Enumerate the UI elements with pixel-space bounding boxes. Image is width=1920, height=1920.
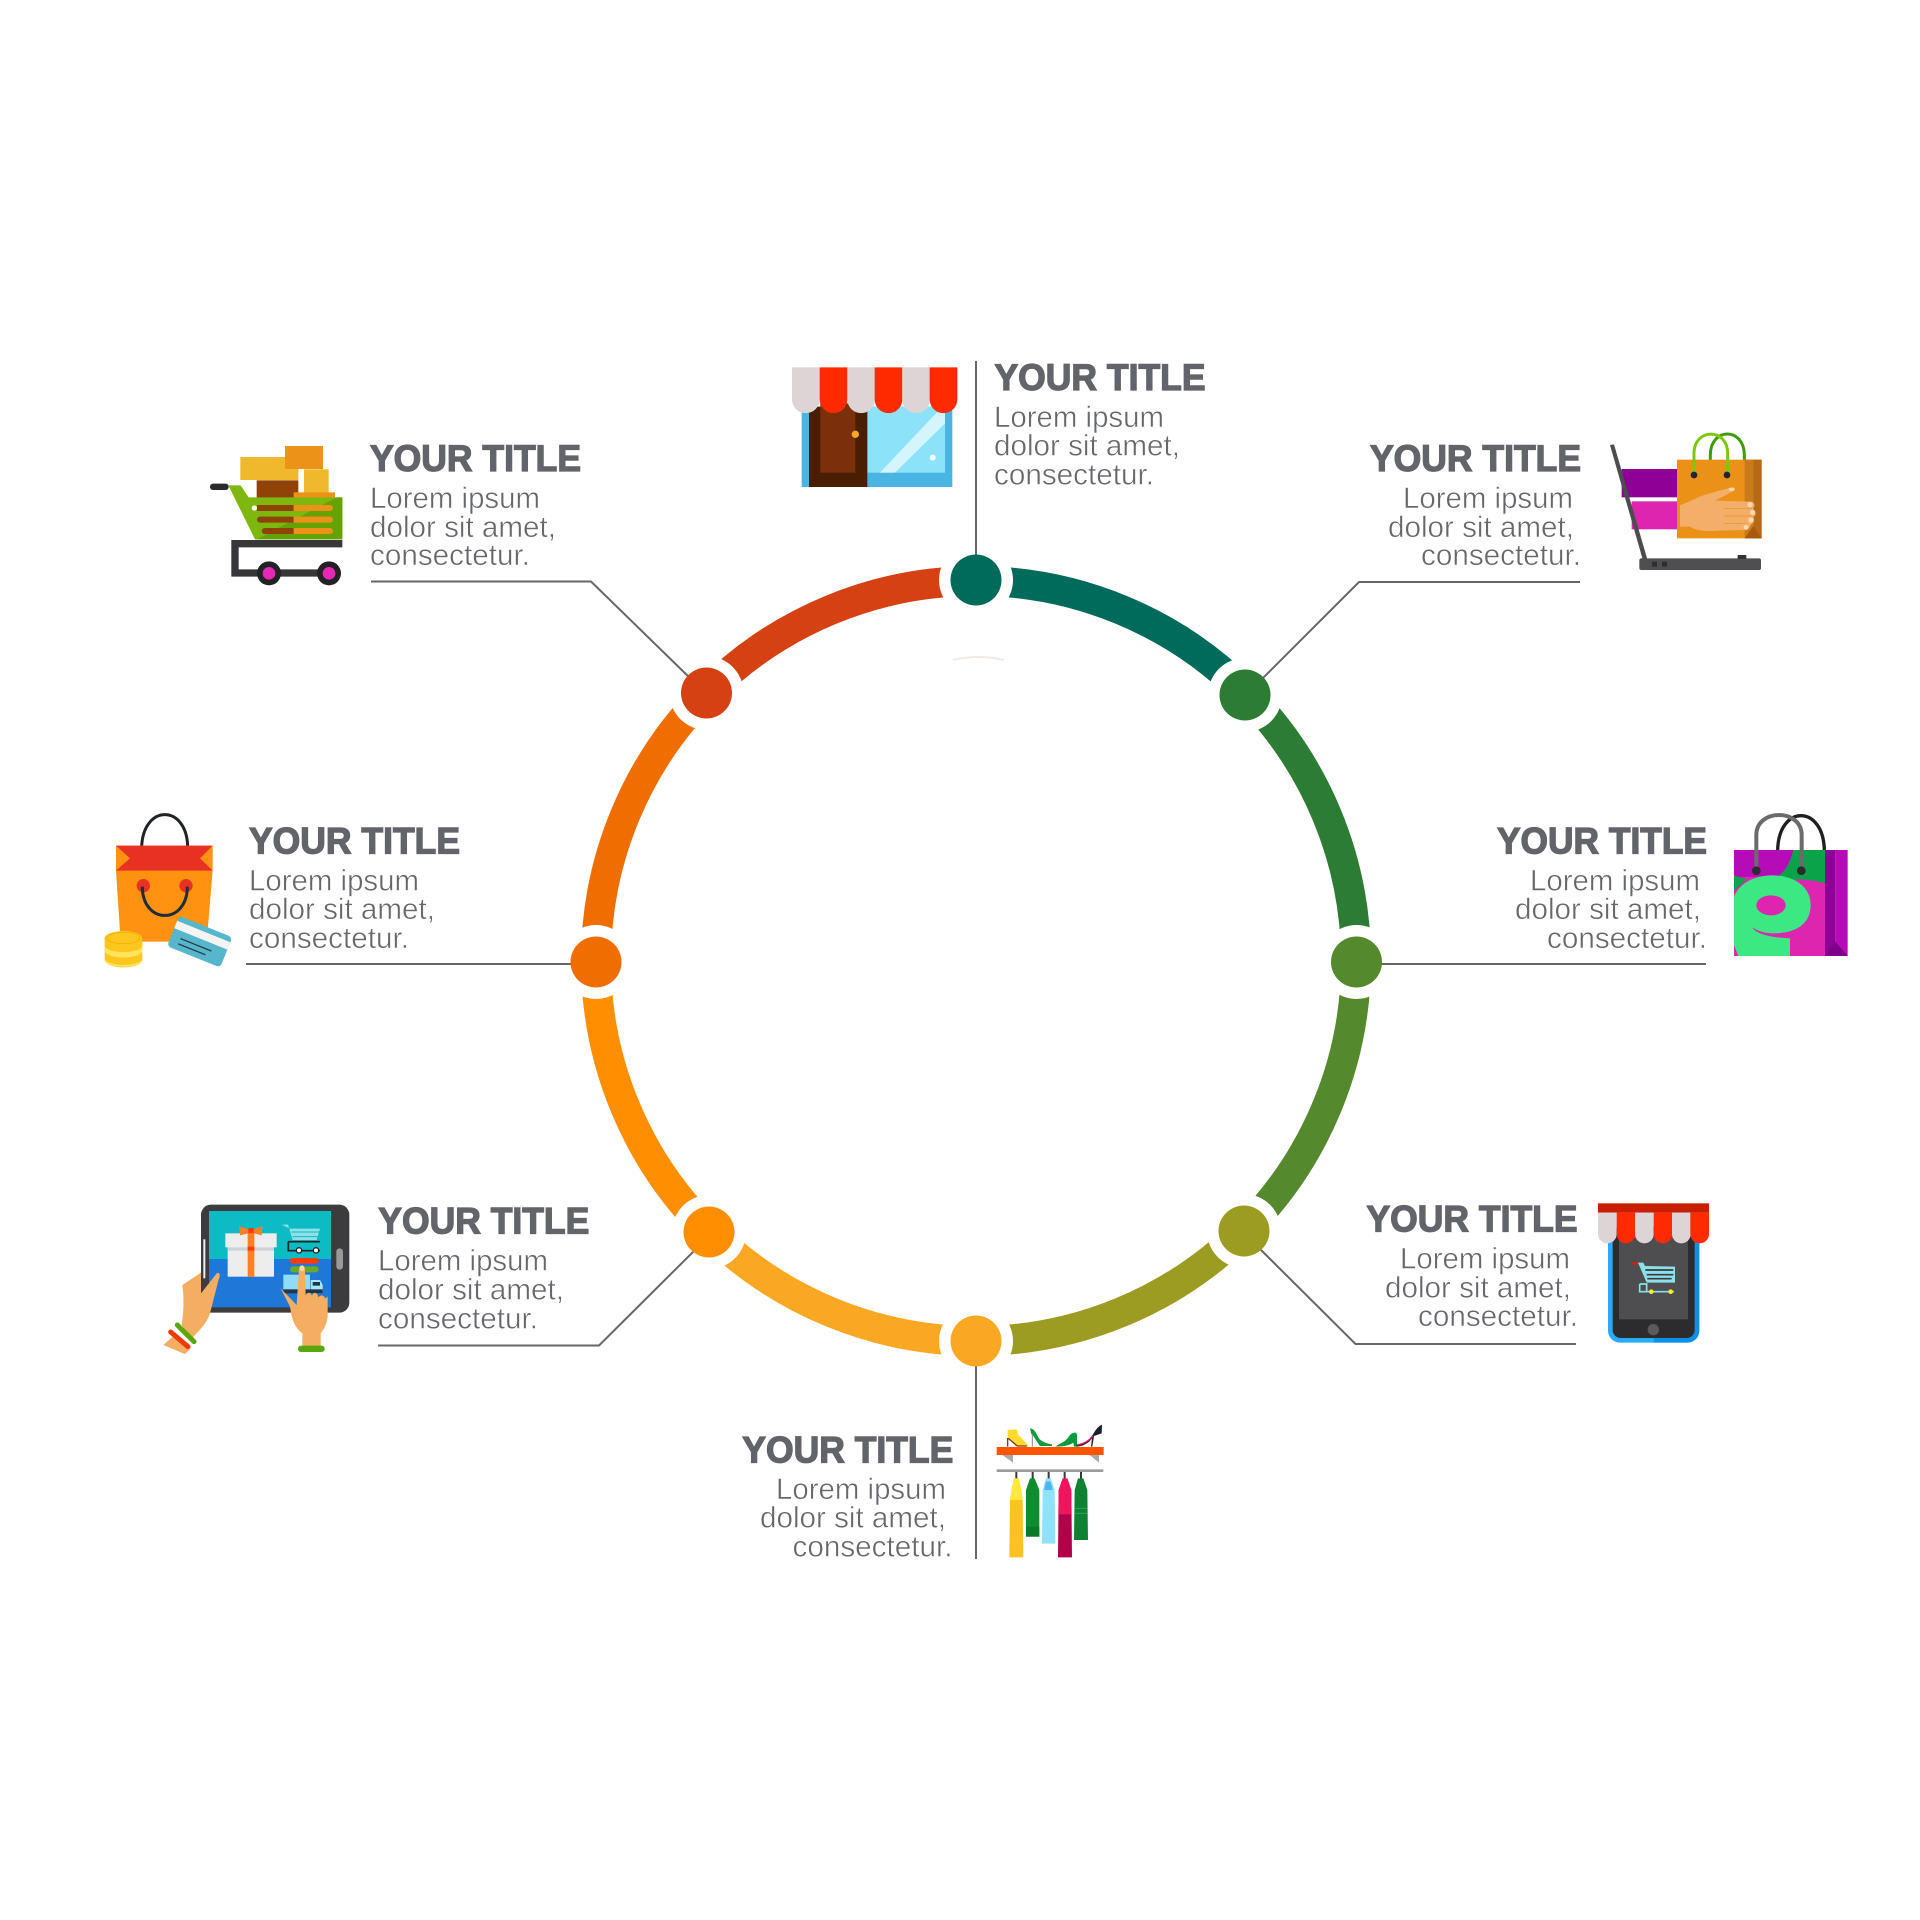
heading: YOUR TITLE [370,438,581,479]
ring nodes [570,554,1382,1366]
text block: dolor sit amet, [760,1501,946,1534]
panel: top right laptop [1370,434,1762,572]
panel: right bag [1497,815,1848,956]
text block: consectetur. [994,458,1154,491]
icon: magenta e-commerce bag [1734,815,1848,956]
text block: Lorem ipsum [776,1473,946,1506]
text block: consectetur. [1418,1300,1578,1333]
icon: laptop delivering bag [1610,434,1762,570]
text block: dolor sit amet, [249,893,435,926]
text block [1385,1243,1578,1333]
text block: dolor sit amet, [378,1273,564,1306]
text block [378,1245,564,1335]
heading: YOUR TITLE [1366,1198,1578,1239]
text block [249,864,435,955]
text block: Lorem ipsum [1403,482,1573,515]
text block [1515,864,1707,955]
text block: Lorem ipsum [1530,864,1700,898]
heading: YOUR TITLE [1497,820,1707,861]
text block: dolor sit amet, [1388,511,1574,544]
panel: bottom clothing rack [742,1425,1104,1564]
panel: top store [792,357,1206,491]
text block [760,1473,952,1564]
text block [994,401,1180,491]
icon: orange shopping bag with card and coins [104,815,232,968]
icon: shopping cart [210,446,342,585]
text block [1388,482,1581,572]
text block: dolor sit amet, [1515,893,1701,926]
leader lines [246,361,1706,1559]
heading: YOUR TITLE [249,820,460,861]
text block: dolor sit amet, [370,511,556,544]
text block: Lorem ipsum [994,401,1164,434]
text block: consectetur. [1421,539,1581,572]
text block: Lorem ipsum [1400,1243,1570,1276]
heading: YOUR TITLE [1370,438,1581,479]
text block: consectetur. [249,922,409,955]
heading: YOUR TITLE [994,357,1206,398]
circular ring diagram [246,361,1706,1559]
text block: Lorem ipsum [378,1245,548,1278]
ring node halos [559,543,1394,1378]
text block: dolor sit amet, [1385,1271,1571,1304]
text block: Lorem ipsum [370,482,540,515]
panel: bottom right phone [1366,1198,1709,1343]
text block: consectetur. [1547,922,1707,955]
text block: Lorem ipsum [249,864,419,898]
panel: top left cart [210,438,581,585]
heading: YOUR TITLE [378,1200,589,1241]
panel: left bag [104,815,460,968]
icon: smartphone store [1598,1203,1709,1343]
icon: hands using tablet [163,1205,349,1354]
ring segments [596,581,1356,1341]
panel: bottom left tablet [163,1200,589,1354]
text block: consectetur. [792,1531,952,1564]
text block: dolor sit amet, [994,430,1180,463]
text block: consectetur. [378,1302,538,1335]
text block [370,482,556,572]
heading: YOUR TITLE [742,1429,953,1470]
icon: shoes and clothes rack [997,1425,1104,1557]
text block: consectetur. [370,539,530,572]
icon: storefront [792,367,957,487]
